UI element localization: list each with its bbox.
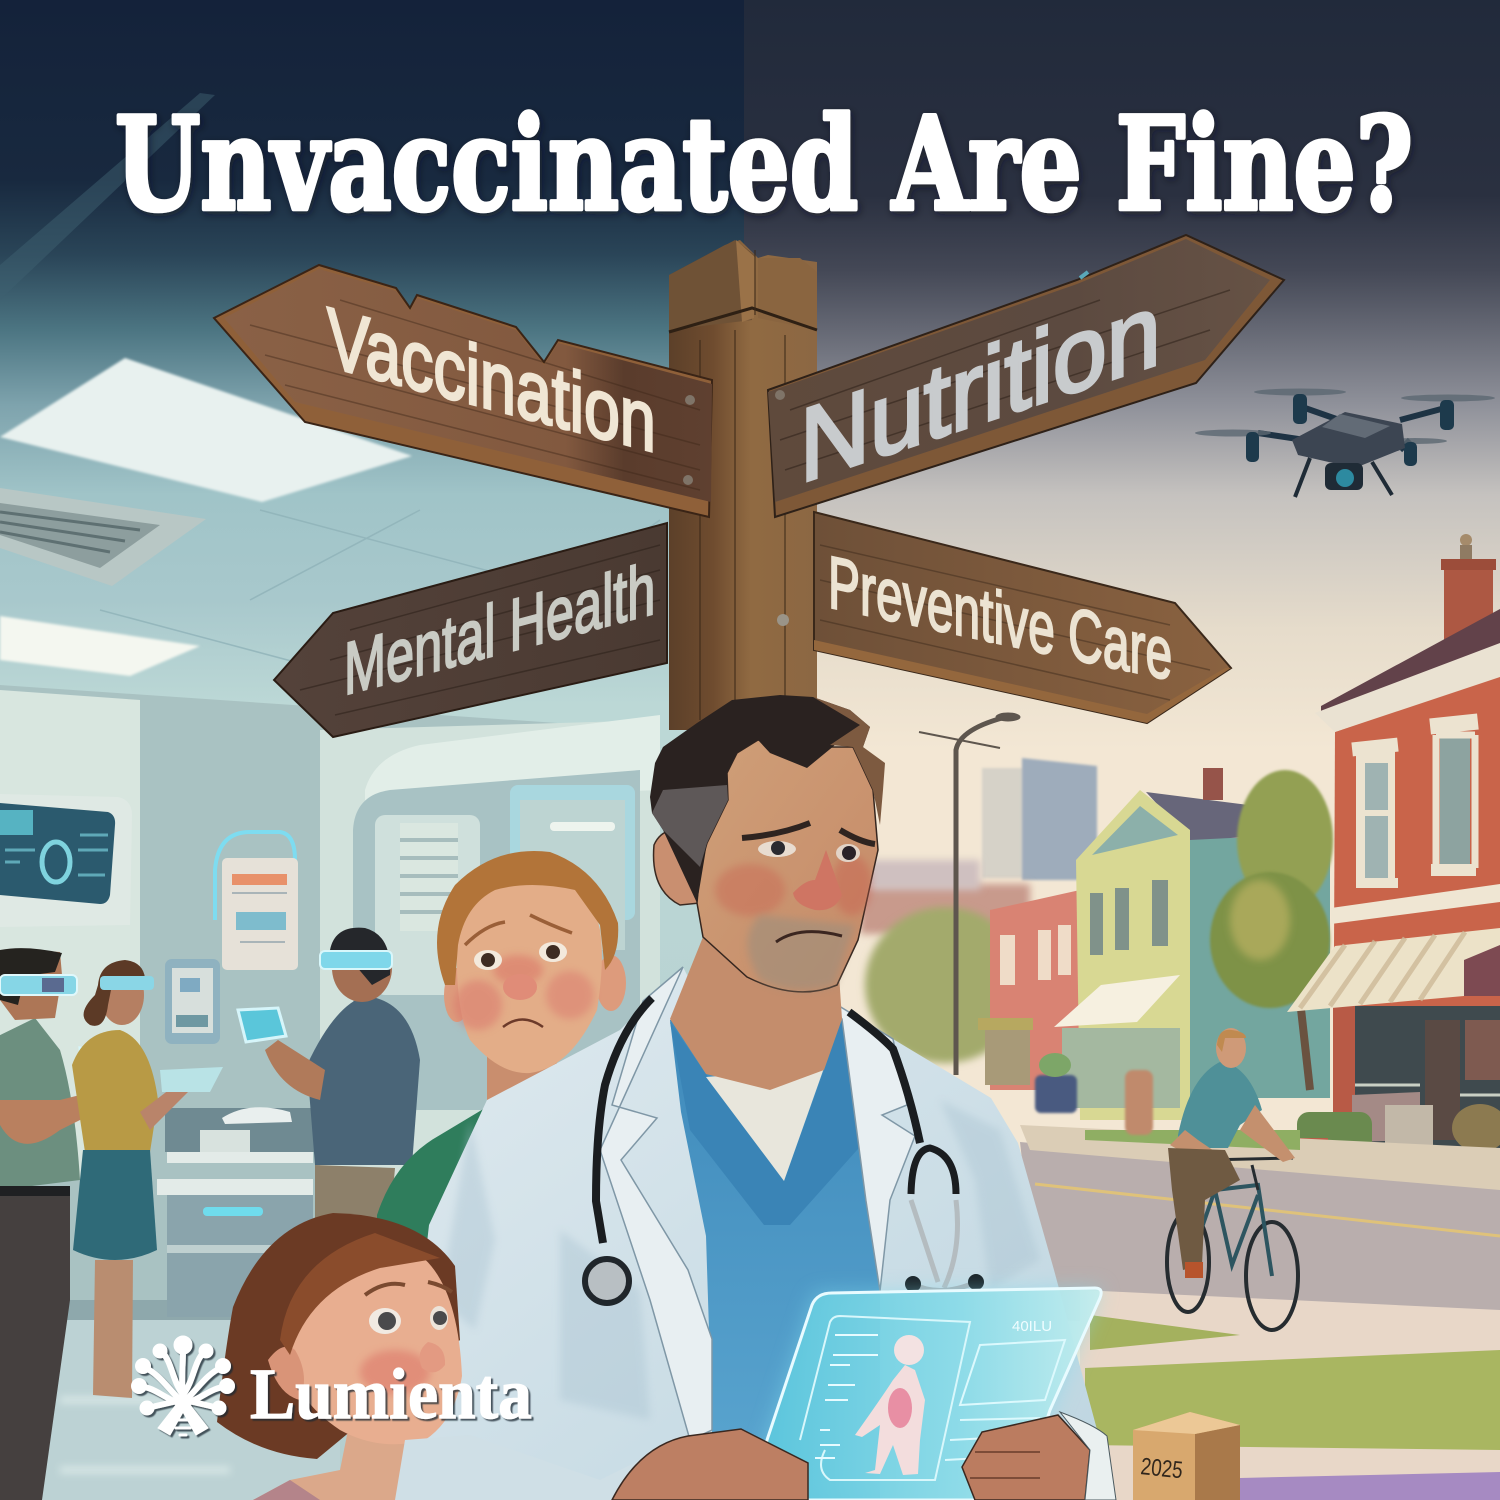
woman with tablet xyxy=(72,960,223,1398)
clinic window xyxy=(353,770,640,1110)
sidewalk and grass xyxy=(1080,1290,1500,1500)
shop awning xyxy=(1287,928,1500,1012)
counter xyxy=(157,1107,315,1317)
distant tower xyxy=(982,758,1097,880)
wall device xyxy=(165,959,220,1044)
air vent xyxy=(0,488,206,586)
wall info panel xyxy=(215,832,298,970)
ceiling light panel xyxy=(0,358,412,502)
ear xyxy=(654,830,700,905)
street lamp xyxy=(919,713,1020,1075)
signpost xyxy=(214,235,1284,1000)
tree left xyxy=(865,907,1025,1063)
logo icon xyxy=(132,1336,234,1435)
logo wordmark: Lumienta xyxy=(250,1354,532,1434)
person with AR glasses, far left xyxy=(0,948,132,1500)
sign: Nutrition: Nutrition xyxy=(800,270,1161,506)
mouth xyxy=(776,932,842,942)
scrub top xyxy=(670,1019,880,1500)
brown hair side xyxy=(813,697,885,825)
pink building xyxy=(978,890,1085,1090)
hair xyxy=(650,695,870,903)
sign: Nutrition xyxy=(768,235,1284,517)
post xyxy=(669,240,817,1000)
neck xyxy=(670,937,842,1090)
teal house side xyxy=(1190,838,1330,1098)
sign: Preventive Care: Preventive Care xyxy=(828,540,1172,696)
drone xyxy=(1195,388,1495,497)
distant mauve building xyxy=(860,884,1030,934)
hedges xyxy=(1297,1104,1500,1162)
purple mat xyxy=(1240,1472,1500,1500)
clinic background (left) xyxy=(0,0,744,1500)
undershirt xyxy=(706,1068,824,1181)
doctor's arm and hands xyxy=(395,1412,1116,1500)
shop front xyxy=(1333,1006,1500,1148)
sign: Mental Health: Mental Health xyxy=(344,546,655,711)
wall monitor xyxy=(0,794,132,927)
distant pedestrians xyxy=(1035,1053,1153,1135)
eyes xyxy=(758,841,860,862)
brick building xyxy=(1287,534,1500,1170)
nose xyxy=(793,850,842,910)
grey temple xyxy=(652,785,728,867)
sign: Mental Health xyxy=(274,523,667,737)
boy xyxy=(377,851,626,1240)
cyclist xyxy=(1167,1028,1298,1330)
tablet heading: 40ILU xyxy=(1012,1318,1052,1335)
sign: Vaccination: Vaccination xyxy=(327,290,656,471)
doctor xyxy=(395,695,1116,1500)
logo: Lumienta xyxy=(132,1336,532,1435)
sign: Preventive Care xyxy=(777,512,1231,723)
yellow house xyxy=(1054,768,1272,1120)
wall xyxy=(0,685,660,1320)
box labelled 2025 xyxy=(1133,1412,1240,1500)
stethoscope xyxy=(585,998,984,1303)
ceiling light strip xyxy=(0,616,200,676)
box labelled 2025: 2025 xyxy=(1139,1453,1184,1484)
round tree right xyxy=(1210,770,1333,1090)
coat shading xyxy=(440,1100,1040,1420)
white coat xyxy=(395,967,1116,1500)
street xyxy=(1020,1142,1500,1330)
sign: Vaccination xyxy=(214,265,712,517)
town background (right) xyxy=(744,0,1500,1500)
coat lapels xyxy=(600,967,915,1440)
brows xyxy=(742,823,875,844)
floor xyxy=(0,1318,340,1500)
face xyxy=(697,740,878,992)
girl xyxy=(217,1213,462,1500)
holographic tablet xyxy=(750,1288,1102,1500)
man in blue shirt xyxy=(238,928,420,1225)
body figure xyxy=(855,1335,925,1475)
